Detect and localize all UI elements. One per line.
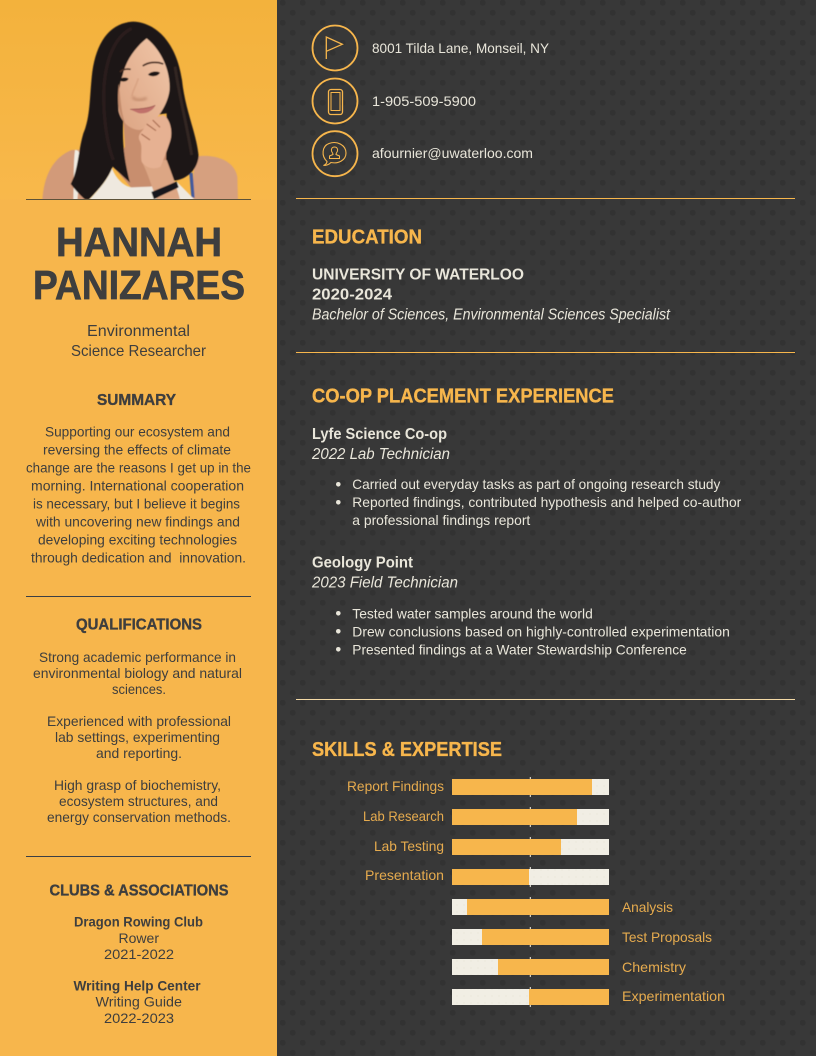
clubs list: 2022-2023 — [104, 1010, 174, 1026]
email: afournier@uwaterloo.com — [372, 145, 533, 161]
clubs list: Writing Help Center — [74, 978, 201, 994]
qualifications text: ecosystem structures, and — [59, 793, 218, 809]
job: Geology Point: Drew conclusions based on highly-controlled experimentation — [352, 623, 730, 639]
clubs list: 2021-2022 — [104, 946, 174, 962]
education heading: EDUCATION — [312, 226, 422, 248]
education section — [312, 226, 671, 324]
job: Geology Point: Presented findings at a Water Stewardship Conference — [352, 641, 687, 657]
bar: Experimentation — [452, 988, 725, 1005]
skills heading: SKILLS & EXPERTISE — [312, 739, 502, 761]
bar: Test Proposals — [452, 929, 712, 945]
experience heading: CO-OP PLACEMENT EXPERIENCE — [312, 386, 614, 408]
clubs list: Dragon Rowing Club — [74, 914, 203, 930]
name heading: PANIZARES — [33, 262, 245, 308]
bar: Lab Research — [363, 808, 609, 825]
qualifications text: lab settings, experimenting — [55, 729, 220, 745]
education details: Bachelor of Sciences, Environmental Sciences Specialist — [312, 306, 671, 324]
bar: Lab Testing — [374, 838, 609, 855]
job: Lyfe Science Co-op: Carried out everyday tasks as part of ongoing research study — [352, 476, 720, 492]
clubs heading: CLUBS & ASSOCIATIONS — [50, 882, 229, 900]
job: Lyfe Science Co-op — [311, 426, 742, 528]
bar: Analysis — [452, 899, 673, 915]
bar: Lab Research: Lab Research — [363, 808, 444, 824]
job: Geology Point: 2023 Field Technician — [311, 575, 458, 592]
bar: Lab Testing: Lab Testing — [374, 838, 444, 854]
bar: Report Findings — [347, 778, 609, 795]
qualifications text: and reporting. — [96, 745, 182, 761]
bar: Experimentation: Experimentation — [622, 988, 725, 1004]
job: Lyfe Science Co-op: Reported findings, contributed hypothesis and helped co-author — [352, 494, 742, 510]
job: Geology Point — [311, 555, 730, 657]
summary text: with uncovering new findings and — [35, 514, 240, 530]
summary text: through dedication and innovation. — [31, 550, 246, 566]
summary text: reversing the effects of climate — [43, 442, 231, 458]
job: Geology Point: Tested water samples around the world — [352, 605, 593, 621]
portrait photo — [0, 0, 277, 200]
summary text — [26, 424, 251, 566]
name heading: HANNAH — [56, 219, 222, 265]
bar: Analysis: Analysis — [622, 899, 673, 915]
panel: dark background — [277, 0, 816, 1056]
qualifications text: Experienced with professional — [47, 713, 231, 729]
job title: Science Researcher — [71, 343, 207, 360]
education details: UNIVERSITY OF WATERLOO — [312, 266, 524, 284]
bar: Presentation: Presentation — [365, 867, 444, 883]
qualifications text: environmental biology and natural — [33, 665, 242, 681]
contact block — [312, 26, 550, 176]
clubs list: Rower — [118, 930, 159, 946]
qualifications heading: QUALIFICATIONS — [76, 616, 202, 634]
phone number: 1-905-509-5900 — [372, 93, 476, 109]
bar: Report Findings: Report Findings — [347, 778, 444, 794]
experience section — [311, 386, 742, 657]
summary text: change are the reasons I get up in the — [26, 460, 251, 476]
summary heading: SUMMARY — [97, 392, 176, 409]
clubs list — [74, 914, 203, 1026]
bar: Test Proposals: Test Proposals — [622, 929, 712, 945]
bar: Chemistry: Chemistry — [622, 959, 686, 975]
name heading — [33, 219, 245, 308]
photo base rule — [26, 198, 251, 200]
address: 8001 Tilda Lane, Monseil, NY — [372, 40, 550, 56]
summary text: morning. International cooperation — [31, 478, 244, 494]
qualifications text: Strong academic performance in — [39, 649, 236, 665]
summary text: is necessary, but I believe it begins — [33, 496, 240, 512]
qualifications text: energy conservation methods. — [47, 809, 231, 825]
qualifications text — [33, 649, 242, 825]
icon: speech bubble with person — [312, 131, 358, 176]
skills section — [312, 739, 725, 1007]
job title — [71, 323, 207, 360]
qualifications text: High grasp of biochemistry, — [54, 777, 221, 793]
job title: Environmental — [87, 323, 190, 340]
bar: Chemistry — [452, 959, 686, 975]
job: Geology Point: Geology Point — [312, 555, 413, 572]
bar: Presentation — [365, 867, 609, 885]
summary text: developing exciting technologies — [38, 532, 237, 548]
skills chart — [347, 777, 725, 1007]
job: Lyfe Science Co-op: Lyfe Science Co-op — [312, 426, 447, 443]
icon: phone — [312, 78, 358, 124]
education details — [312, 266, 671, 324]
summary text: Supporting our ecosystem and — [45, 424, 230, 440]
education details: 2020-2024 — [312, 286, 392, 304]
job: Lyfe Science Co-op: a professional findings report — [352, 512, 530, 528]
qualifications text: sciences. — [112, 681, 166, 697]
panel: sidebar — [0, 0, 277, 1056]
job: Lyfe Science Co-op: 2022 Lab Technician — [311, 446, 450, 463]
icon: flag — [312, 26, 358, 70]
clubs list: Writing Guide — [96, 994, 182, 1010]
